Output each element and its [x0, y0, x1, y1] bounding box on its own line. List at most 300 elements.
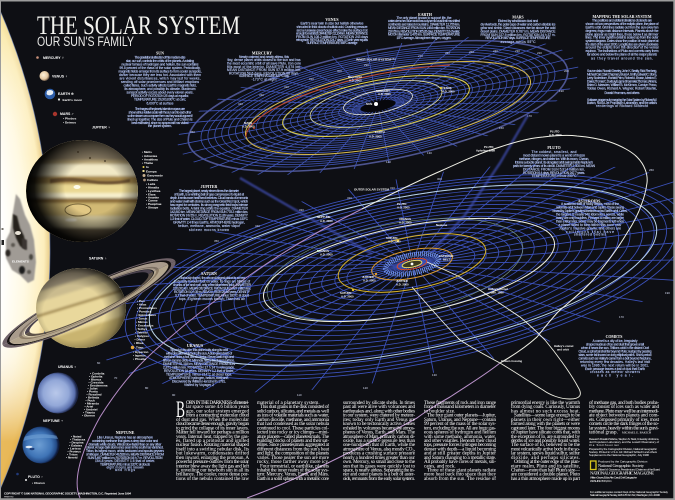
- article: column 2: solid carbon, silicates, and metals as well: [257, 408, 330, 414]
- article: column 4: The four giant outer planets—Jupiter,: [427, 412, 496, 419]
- text block: neptune: planet. A huge dark storm once seen in the south has vanished.: [86, 446, 164, 450]
- text block: sun: magnetic fields emerge from its surface to form cooler sunspots,: [118, 70, 202, 74]
- jupiter moons list: • Leda: [146, 182, 155, 186]
- outer solar system labels: A.D. 2000: [399, 220, 412, 224]
- text block: sun: SUN: [156, 52, 164, 56]
- outer grid degree ticks: 310: [390, 186, 395, 190]
- outer solar system grid: [105, 164, 674, 392]
- text block: mapping the solar system: as they travel around the sun.: [591, 56, 653, 60]
- article: column 2: Four terrestrial, or earthlike, planets: [260, 463, 329, 469]
- uranus moons list: • Cordelia: [90, 372, 105, 376]
- article: column 4: and other volatiles. Beneath their cloud: [424, 438, 496, 444]
- article: column 4: Saturn, Uranus, and Neptune—contain: [424, 417, 496, 423]
- text block: sun image note: so the viewer can compare them as they would appear if: [128, 114, 193, 118]
- text block: sun: sending off solar prominences and brilliant eruptions: [121, 80, 199, 84]
- inner solar system labels: VENUS: [442, 86, 452, 90]
- halley's comet orbit: [412, 262, 580, 399]
- jupiter moons list: • Adrastea: [142, 154, 157, 158]
- inner solar system labels: A.D. 2000: [369, 134, 382, 138]
- text block: asteroids: than a kilometer. Some may be fragments left when: [556, 220, 624, 224]
- text block: mercury: fills most of the interior. DIAMETER 4,878 km.: [227, 65, 301, 69]
- text block: mapping the solar system: equinox. The inclinations of Pluto and comets carry them: [586, 49, 659, 53]
- jupiter moons list: Ganymede: [147, 174, 163, 178]
- national geographic logo and imprint: National Geographic Society, 1145 17th St. N.W., Washington, D.C. 20036: [590, 493, 660, 497]
- outer grid degree ticks: 330: [299, 208, 304, 212]
- planet: saturn with rings: [2, 258, 176, 348]
- saturn moons list: • Pandora: [137, 310, 152, 314]
- text block: sun: [118, 52, 202, 106]
- text block: sun: PERIOD OF ROTATION 25 days at equator.: [131, 94, 189, 98]
- national geographic logo and imprint: [590, 460, 669, 497]
- text block: comets: stars, some fall inward on long elliptical paths. Short-period: [578, 353, 652, 357]
- text block: uranus: Tipped on its side, this planet rolls along its orbit: [170, 348, 228, 352]
- outer solar system labels: JUPITER: [362, 275, 374, 279]
- text block: asteroids: shattered bodies: [574, 232, 606, 236]
- article: column 5: lar system, spews liquid sulfur, sulfur: [511, 450, 580, 457]
- text block: mars: MARS: [512, 16, 524, 20]
- article: column 5: [511, 400, 581, 482]
- elements: chart of sun composition: [2, 194, 36, 283]
- inner grid degree ticks: 330: [259, 93, 264, 97]
- article: column 6: methane. Pluto may well be an intermedi-: [589, 408, 659, 414]
- inner solar system labels: EARTH: [375, 130, 385, 134]
- inner grid degree ticks: 280: [391, 57, 396, 61]
- outer solar system labels: A.D. 2000: [320, 252, 333, 256]
- text block: uranus: [163, 344, 236, 387]
- text block: jupiter: [170, 185, 249, 232]
- jupiter moons list: • Elara: [146, 192, 156, 196]
- text block: mars: Etched by windblown dust and: [498, 19, 538, 23]
- saturn moons list: Titan: [136, 346, 143, 350]
- text block: jupiter: The largest planet, nearly eleven times the diameter: [179, 189, 240, 193]
- credits below article: Jet Propulsion Laboratory and the Lowell Observatory of: [589, 440, 659, 444]
- neptune moons list: • Larissa: [68, 446, 81, 450]
- text block: mapping the solar system: far above and below the plane of all the major planets: [587, 52, 657, 56]
- text block: credits: Source data: Ronald Greeley, John K. Beatty, Rick Fienberg,: [587, 69, 657, 73]
- text block: earth: The only planet known to support life, the: [396, 16, 452, 20]
- jupiter moons list: • Pasiphae: [146, 202, 162, 206]
- article: column 3: surrounded by silicate shells. In times: [343, 400, 415, 406]
- article: column 6: [589, 399, 660, 436]
- text block: saturn: [173, 272, 252, 301]
- planet: uranus: [38, 372, 78, 414]
- article: column 6: MICHAEL E. BAKICH: [622, 430, 652, 434]
- text block: venus: and a runaway greenhouse effect make the surface hot: [296, 28, 368, 32]
- text block: uranus: fifteen moons circle it; Miranda has a fractured surface.: [163, 358, 235, 362]
- outer solar system labels: PLUTO: [397, 202, 407, 206]
- credits below article: Society. Printed in U.S.A. Art: Richard Schlecht and others: [589, 450, 658, 454]
- outer grid degree ticks: 190: [665, 291, 670, 295]
- article: column 1: Matter fell inward for perhaps a million: [176, 428, 249, 436]
- article: column 5: has almost no such excess heat.: [511, 408, 580, 414]
- text block: pluto: The coldest, smallest, and: [532, 150, 577, 154]
- outer grid degree ticks: 90: [172, 393, 176, 397]
- inner grid degree ticks: 220: [537, 51, 542, 55]
- credits below article: the Smithsonian: [589, 443, 619, 447]
- uranus moons list: • Ariel: [84, 404, 93, 408]
- inner grid degree ticks: 250: [469, 50, 474, 54]
- inner grid degree ticks: 300: [337, 69, 342, 73]
- title: [37, 11, 240, 49]
- article: column 5: dioxide, and perhaps silicates.: [511, 455, 580, 461]
- text block: saturn: SATURN: [201, 272, 217, 276]
- text block: pluto: PLUTO: [547, 146, 561, 150]
- pluto planet and charon label: [16, 473, 45, 485]
- national geographic logo and imprint: NATIONAL GEOGRAPHIC MAGAZINE: [590, 470, 654, 476]
- text block: asteroids: Jupiter's massive gravity, and others are: [559, 226, 621, 230]
- outer solar system labels: Aphelion 1989: [476, 148, 495, 152]
- national geographic logo and imprint: WASHINGTON, D.C.: [590, 479, 612, 483]
- jupiter moons list: • Ananke: [146, 196, 159, 200]
- neptune moons list: • Naiad: [71, 434, 81, 438]
- inner solar system labels: Mars Orbit: [348, 75, 362, 79]
- article: column 5: Orbiting at the outer edge of the plan-: [514, 458, 580, 465]
- article: column 1: then inward, enlarging the protosun. A: [176, 455, 249, 461]
- text block: mercury: -173°C at night: [252, 78, 277, 82]
- text block: earth: 15°C average. Atmosphere nitrogen, oxygen.: [396, 36, 452, 40]
- text block: sun: star, our sun, controls the orbits of the planets. A rotating: [126, 59, 194, 63]
- text block: asteroids: collisions that have: [566, 230, 614, 234]
- text block: credits: Larry Soderblom, Ronald Prinn, Robert A. Brown, Merton E.: [587, 76, 657, 80]
- article: column 2: as ices of volatile materials such as water,: [257, 412, 329, 419]
- article: column 5: are considered a double planet. Pluto: [511, 472, 580, 478]
- outer grid degree ticks: 70: [114, 376, 118, 380]
- neptune moons list: • Proteus: [68, 450, 81, 454]
- inner grid degree ticks: 290: [364, 63, 369, 67]
- article: column 3: past all were alive with volcanoes and: [343, 404, 415, 410]
- outer solar system labels: PLUTO: [484, 145, 494, 149]
- outer solar system labels: A.D. 2000: [549, 133, 562, 137]
- inner grid degree ticks: 260: [445, 51, 450, 55]
- text block: mapping the solar system: the start of the year 2000. Longitudes are given clockwise: [586, 42, 659, 46]
- text block: saturn: tops. Eighteen moons known; Titan has air: [179, 297, 246, 301]
- text block: saturn: 120,000 km. MEAN DISTANCE FROM SUN 1,427 million km.: [173, 286, 251, 290]
- text block: mars: FROM SUN 227.9 million km. ROTATION 24 h 37 m.: [480, 33, 556, 37]
- outer grid degree ticks: 170: [619, 315, 624, 319]
- article: column 3: pheres of Venus, Earth, and Mars. The: [343, 428, 416, 436]
- text block: neptune: and rings: [115, 468, 135, 472]
- outer solar system orbits: [135, 150, 671, 400]
- planet: jupiter: [26, 140, 138, 242]
- text block: venus: retrograde. REVOLUTION 224.7 days. 1 Earth year equals: [296, 38, 368, 42]
- outer grid degree ticks: 80: [145, 386, 149, 390]
- credits below article: Prepared by the Cartographic Division, National Geographic: [589, 447, 658, 451]
- mars planet and moons label: MARS ♂: [60, 112, 74, 116]
- article: column 4: with some methane, ammonia, water,: [424, 434, 496, 440]
- uranus moons list: • Puck: [86, 398, 95, 402]
- article: column 4: and Saturn changing to a metallic state.: [424, 455, 496, 461]
- outer solar system labels: and orbit: [557, 348, 569, 352]
- uranus moons list: • Desdemona: [88, 384, 108, 388]
- article: column 1: lar space some 4.6 billion years: [186, 404, 249, 410]
- saturn moons list: • Pan: [137, 299, 145, 303]
- article: column 2: [257, 399, 330, 482]
- saturn label: SATURN ♄: [89, 256, 107, 260]
- neptune moons list: [66, 434, 85, 460]
- neptune moons list: • Galatea: [69, 444, 82, 448]
- text block: saturn: Gloriously ringed, the second-largest planet is so low: [179, 276, 246, 280]
- mars planet and moons label: [53, 112, 77, 124]
- text block: saturn: in density it would float on water. Its rings are billions of: [174, 280, 250, 284]
- text block: credits: Burton, NASA Jet Propulsion Laboratory, and the artist's: [587, 101, 657, 105]
- text block: mars: grow and shrink. Giant volcanoes rise far above the cold: [480, 26, 556, 30]
- outer solar system labels: ASTEROID: [439, 254, 453, 258]
- article: column 3: exhaled by volcanoes became the atmos-: [343, 425, 415, 431]
- jupiter label: JUPITER ♃: [92, 126, 110, 130]
- uranus moons list: • Bianca: [89, 378, 101, 382]
- article: column 1: brilliance. The cooler, more dense por-: [176, 472, 249, 478]
- inner solar system labels: MARS: [244, 121, 252, 125]
- text block: neptune: Like Uranus, Neptune has an atmosphere: [97, 436, 153, 440]
- text block: earth: continents and raised mountains. DIAMETER 12,756 km.: [388, 22, 460, 26]
- text block: venus: FROM SUN 108.2 million km. ROTATION 243 days: [296, 35, 368, 39]
- article: column 1: es, flared up a protostar and ignited: [176, 437, 249, 444]
- inner solar system labels: A.D. 2000: [242, 124, 255, 128]
- pluto orbit: [77, 135, 647, 498]
- article: column 6: bly consist of ices such as water and: [589, 403, 659, 410]
- text block: mercury: MEAN DISTANCE FROM SUN 57.9 million km.: [227, 68, 301, 72]
- national geographic logo and imprint: For additional copies contact Dept of the National Geographic Society: [590, 490, 669, 494]
- article: column 4: tem, excluding the sun. All are huge gas-: [424, 425, 496, 431]
- credits below article: Supplement to the National Geographic, July 1990: [589, 453, 649, 457]
- article: column 2: and light, the composition of the planets: [257, 450, 329, 457]
- text block: jupiter: JUPITER: [201, 185, 218, 189]
- national geographic logo and imprint: Produced by the Cartographic Division: [598, 460, 648, 464]
- text block: venus: shrouded in thick clouds of sulfuric acid. Crushing pressure: [296, 25, 368, 29]
- outer solar system labels: SATURN: [340, 291, 351, 295]
- outer solar system labels: A.D. 2000: [320, 219, 333, 223]
- jupiter moons list: • Himalia: [146, 186, 159, 190]
- text block: sun: are violent disturbances, which may last for weeks,: [120, 76, 201, 80]
- article: column 1: B: [176, 397, 185, 422]
- outer grid degree ticks: 300: [437, 177, 442, 181]
- text block: neptune: NEPTUNE: [116, 431, 135, 435]
- inner solar system labels: A.D. 2000: [349, 78, 362, 82]
- text block: earth: EARTH: [418, 13, 432, 17]
- text block: earth: 23 h 56 m. REVOLUTION 365.26 days. DENSITY 5.5 of water.: [388, 30, 461, 34]
- article: column 1: but lukewarm, condensates drifted: [176, 450, 249, 457]
- outer solar system labels: A.D. 2000: [363, 278, 376, 282]
- text block: sun: sunspot activity occurs about every eleven years.: [126, 90, 194, 94]
- uranus moons list: • Belinda: [86, 396, 99, 400]
- text block: mercury: MERCURY: [252, 52, 272, 56]
- text block: venus: Earth's near twin in size but hellish otherwise: [300, 22, 364, 26]
- text block: uranus: TEMPERATURE minus 214°C at cloud tops.: [166, 372, 232, 376]
- text block: saturn: ROTATION 10 h 39 m. REVOLUTION 29.46 years. DENSITY: [174, 290, 251, 294]
- planet: neptune: [22, 426, 60, 464]
- article: column 5: from dying coals. Curiously, Uranus: [511, 403, 580, 410]
- saturn moons list: • Epimetheus: [136, 313, 156, 317]
- copyright line: PRINTED: [4, 496, 14, 498]
- outer solar system labels: URANUS: [399, 217, 411, 221]
- outer solar system labels: Halley's comet: [554, 344, 574, 348]
- outer solar system labels: A.D. 2000: [396, 282, 409, 286]
- neptune label: NEPTUNE ♆: [43, 419, 63, 423]
- text block: credits: Davies, Thomas C. Duxbury, Eugene Shoemaker, Thomas J. Ahrens,: [587, 80, 657, 84]
- saturn moons list: • Mimas: [136, 320, 148, 324]
- article: column 5: Satellites—some large enough to be: [514, 413, 581, 419]
- text block: pluto: DISTANCE FROM SUN 5,914 million km.: [523, 168, 585, 172]
- outer grid degree ticks: 340: [255, 224, 260, 228]
- text block: comets: COMETS: [606, 335, 622, 339]
- article: column 1: itself into a swirling nebular disk. Its: [176, 445, 249, 452]
- national geographic logo and imprint: National Geographic Society: [598, 463, 645, 468]
- article: column 5: formed along with the planets or were: [511, 420, 581, 427]
- inner solar system grid: [178, 37, 578, 175]
- text block: saturn: 0.7 that of water. TEMPERATURE minus 180°C at cloud: [175, 294, 249, 298]
- jupiter moons list: Europa: [146, 170, 157, 174]
- jupiter moons list: Io: [146, 165, 149, 169]
- text block: sun image note: lined up together. The size of Pluto and Charon is: [128, 118, 193, 122]
- text block: sun image note: The images of the planets, taken from space, are: [135, 107, 185, 111]
- text block: uranus: DIAMETER 51,118 km. MEAN DISTANCE FROM SUN: [163, 362, 236, 366]
- neptune moons list: • Nereid: [66, 456, 78, 460]
- jupiter moons list: • Thebe: [142, 161, 153, 165]
- article: column 3: known to be tectonically active. Gases: [343, 421, 415, 427]
- article: column 6: lar system, heavily within the sun's gravi-: [589, 425, 659, 431]
- text block: earth: [388, 13, 461, 40]
- article: column 5: depths of ice and possibly liquid water.: [511, 437, 580, 444]
- text block: neptune: TEMPERATURE minus 220°C at clouds: [100, 462, 150, 466]
- article: column 3: ner and outer planets is a belt of aster-: [343, 471, 415, 478]
- text block: jupiter: and water swirl with storms such as the Great Red Spot, which: [170, 200, 248, 204]
- article: column 3: earthquakes and, along with other bodies: [343, 408, 415, 414]
- inner solar system labels: A.D. 2000: [442, 90, 455, 94]
- text block: asteroids: inward by Jupiter's gravity sometimes cross Earth's orbit. Ceres,: [552, 209, 628, 213]
- national geographic logo and imprint: Gilbert M. Grosvenor, President and Chairman of the Board: [598, 468, 660, 472]
- text block: neptune: containing methane that gives a deep blue color and: [92, 439, 158, 443]
- outer solar system labels: Neptune: [436, 223, 448, 227]
- outer grid degree ticks: 260: [649, 168, 654, 172]
- pluto planet and charon label: • Charon: [32, 481, 45, 485]
- article: column 5: of Jupiter have silicate cores that, with: [511, 428, 580, 436]
- text block: pluto: it forms a double planet. Its elongated orbit swings inside Neptune's: [515, 160, 593, 164]
- text block: jupiter: helium, methane, ammonia, water vapor: [178, 224, 241, 228]
- uranus moons list: • Oberon: [82, 414, 95, 418]
- text block: credits: Donald Yeomans, and others: [604, 91, 640, 95]
- outer solar system labels: JUPITER: [396, 279, 408, 283]
- neptune moons list: • Thalassa: [70, 438, 85, 442]
- text block: sun: TEMPERATURE 15,000,000°C at core;: [134, 98, 186, 102]
- article: column 2: Earth is a solid sphere with a metallic core: [257, 476, 330, 482]
- article: column 3: in our system, were cratered by meteor-: [343, 413, 415, 419]
- saturn moons list: • Telesto: [135, 330, 148, 334]
- text block: comets: each year.: [597, 374, 633, 378]
- outer grid degree ticks: 130: [432, 373, 437, 377]
- article: column 2: building blocks of planets and their sat-: [257, 437, 329, 444]
- article: column 4: These fragments of rock and iron range: [424, 399, 497, 406]
- text block: mapping the solar system: MAPPING THE SOLAR SYSTEM: [592, 15, 652, 19]
- article: column 3: oxide, has a surface pressure less than: [343, 437, 415, 444]
- text block: credits: Brian G. Marsden, William B. McKinnon, Carolyn Porco,: [587, 83, 657, 87]
- text block: asteroids: the largest, is nearly 940 kilometers across, while: [556, 212, 624, 216]
- text block: comets: when it nears the sun. Trillions orbit in the distant Oort: [581, 346, 649, 350]
- text block: sun: 99.8 percent of the mass of the solar system. Periodically,: [120, 66, 201, 70]
- text block: comets: Each passage leaves a trail of dust that Earth: [585, 367, 645, 371]
- inner solar system labels: A.D. 2000: [378, 92, 391, 96]
- text block: comets: was in 1986; the next return will be in 2061.: [581, 364, 649, 368]
- text block: jupiter: ROTATION 9 h 55 m. REVOLUTION 11.86 years. DENSITY: [170, 214, 249, 218]
- text block: credits: Software, programs for mapping the Solar System by Richard W.: [587, 98, 658, 102]
- text block: mapping the solar system: [586, 15, 659, 60]
- text block: pluto: TEMPERATURE minus 230°C: [532, 174, 577, 178]
- inner grid degree ticks: 160: [499, 126, 504, 130]
- inner solar system orbits: [238, 43, 538, 173]
- article: column 2: material of a planetary system.: [257, 399, 320, 406]
- venus planet and label: [40, 71, 68, 81]
- outer solar system labels: Jan. 1986: [491, 290, 504, 294]
- uranus moons list: • Rosalind: [86, 392, 102, 396]
- article: column 1: tions of the nebula contained the raw: [176, 475, 249, 482]
- saturn moons list: • Hyperion: [133, 350, 148, 354]
- jupiter moons list: • Sinope: [146, 206, 159, 210]
- article: column 2: varies. Those nearer the sun are more: [257, 455, 330, 461]
- article: column 6: tational grasp.: [589, 430, 618, 436]
- text block: mapping the solar system: Earth's orbit. Grid lines radiate out from the sun every ten: [586, 26, 659, 30]
- article: column 4: 99 percent of the mass of the solar sys-: [424, 420, 496, 427]
- earth planet and moon label: EARTH ⊕: [58, 92, 74, 96]
- text block: sun: 6,000°C at surface: [146, 102, 174, 106]
- article: column 1: nuclear fusion. Rotating material shaped: [176, 441, 249, 448]
- text block: mercury: SURFACE TEMPERATURE 427°C day: [239, 74, 289, 78]
- article: column 1: to grind the collapse of its inner layers.: [176, 424, 249, 431]
- article: column 4: denser with depth—a liquid becoming: [424, 446, 496, 452]
- outer grid degree ticks: 320: [347, 196, 352, 200]
- text block: pluto: most distant known planet is a world of frozen: [523, 154, 585, 158]
- text block: credits: renderings of Richard Schlecht: [596, 104, 648, 108]
- text block: jupiter: 1.3 that of water. CLOUD-TOP TEMPERATURE minus 150°C: [170, 217, 249, 221]
- text block: mercury: Nearly cratered and nearly airless, this: [239, 55, 289, 59]
- text block: neptune: SUN 4,497 million km. ROTATION 16 h 7 m. REVOLUTION: [88, 456, 163, 460]
- pluto planet and charon label: PLUTO ♇: [28, 475, 43, 479]
- text block: comets: returning every few decades. Halley's last visit: [580, 360, 650, 364]
- text block: jupiter: radiation belts. A faint ring orbits the equator. DIAMETER: [170, 206, 249, 210]
- inner solar system labels: [242, 58, 455, 138]
- jupiter moons list: • Carme: [146, 198, 158, 202]
- text block: mars: desert plains. DIAMETER 6,787 km. MEAN DISTANCE: [480, 30, 556, 34]
- text block: jupiter: depth. It emits more heat than it receives. Cloud bands of ammonia: [170, 196, 248, 200]
- text block: mars: average minus 55°C: [500, 40, 536, 44]
- text block: jupiter: of Earth, is a whirling ball of gas compressed to liquid at: [174, 192, 244, 196]
- saturn moons list: • Rhea: [134, 341, 144, 345]
- text block: comets: crosses as meteor showers: [590, 370, 640, 374]
- article: column 3: sun that its gases were quickly lost to: [343, 463, 415, 469]
- text block: comets: Cloud, a spherical shell far beyond Pluto; nudged by passing: [578, 350, 652, 354]
- inner grid degree ticks: 200: [564, 69, 569, 73]
- article: column 1: ago, our solar system emerged: [186, 408, 249, 414]
- saturn moons list: • Phoebe: [133, 357, 146, 361]
- article: column 3: ites; today only Earth and Venus are: [343, 417, 416, 423]
- outer solar system labels: A.D. 2000: [341, 294, 354, 298]
- text block: venus: SURFACE TEMPERATURE 465°C average: [306, 41, 358, 45]
- outer grid degree ticks: 120: [363, 386, 368, 390]
- article: column 2: different distances from the sun's heat: [257, 445, 330, 452]
- text block: uranus: Visited by Voyager 2: [184, 383, 214, 387]
- text block: asteroids: a planet failed to form within this zone near: [558, 223, 622, 227]
- text block: sun: The gravitational attraction of this medium-size: [134, 56, 186, 60]
- outer solar system labels: OUTER SOLAR SYSTEM: [354, 188, 390, 192]
- text block: venus: VENUS: [325, 18, 339, 22]
- article: column 4: Three of these giant planets radiate: [427, 466, 497, 474]
- text block: sun image note: best estimated, since no spacecraft has visited: [132, 121, 189, 125]
- mercury planet and label: MERCURY ☿: [43, 56, 64, 60]
- article: column 5: most volcanically active body in the so-: [511, 446, 580, 452]
- saturn moons list: • Janus: [136, 316, 148, 320]
- mars planet and moons label: • Deimos: [63, 120, 76, 124]
- venus planet and label: VENUS ♀: [52, 74, 68, 78]
- article: column 4: tops, pressure forces hydrogen becoming: [424, 441, 496, 448]
- text block: uranus: with poles alternately facing the sun. A blue-green haze of: [166, 352, 232, 356]
